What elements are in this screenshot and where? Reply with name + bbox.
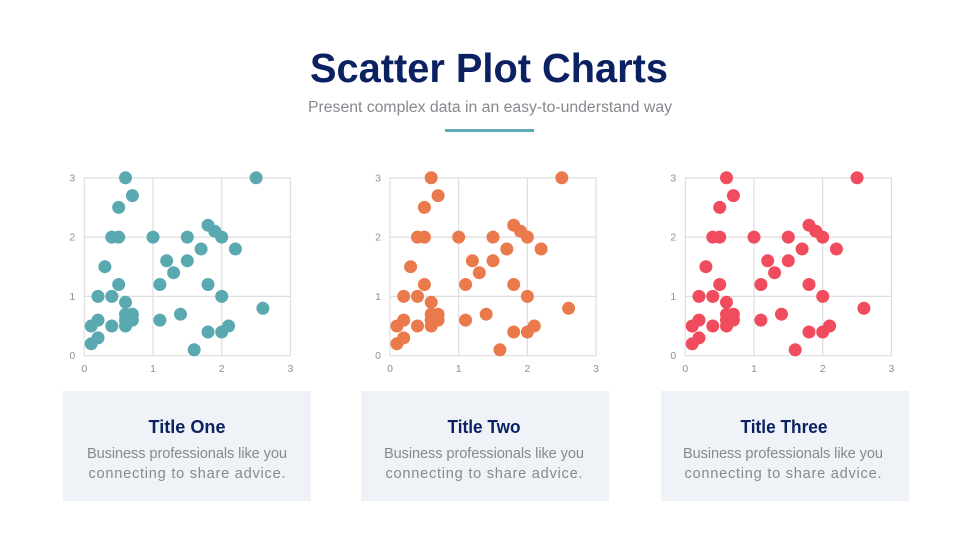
scatter chart: red xyxy=(670,171,894,375)
scatter chart: teal: 2 xyxy=(219,363,225,375)
scatter chart: teal xyxy=(69,171,293,375)
scatter chart: orange: 3 xyxy=(375,172,381,184)
subtitle: Present complex data in an easy-to-understand way xyxy=(308,99,672,116)
scatter chart: orange: 2 xyxy=(375,232,381,244)
scatter chart: teal: 2 xyxy=(69,232,75,244)
scatter chart: teal: 3 xyxy=(287,363,293,375)
scatter chart: teal: 0 xyxy=(69,350,75,362)
panel: title two xyxy=(361,391,609,501)
scatter chart: teal: 1 xyxy=(69,291,75,303)
scatter chart: orange: 2 xyxy=(524,363,530,375)
scatter chart: red: 1 xyxy=(751,363,757,375)
panel: title two: Business professionals like you xyxy=(384,446,584,462)
scatter chart: red: 3 xyxy=(888,363,894,375)
title: Scatter Plot Charts xyxy=(310,45,668,91)
scatter chart: teal: 1 xyxy=(150,363,156,375)
panel: title one: connecting to share advice. xyxy=(88,466,286,482)
scatter chart: teal: 3 xyxy=(69,172,75,184)
panel: title three: connecting to share advice. xyxy=(684,466,882,482)
scatter chart: orange: 1 xyxy=(456,363,462,375)
scatter chart: red: 2 xyxy=(670,232,676,244)
scatter chart: orange xyxy=(375,171,599,375)
panel: title three: Business professionals like you xyxy=(683,446,883,462)
scatter chart: orange: 0 xyxy=(375,350,381,362)
panel: title two: connecting to share advice. xyxy=(386,466,582,482)
panel: title three xyxy=(661,391,909,501)
scatter chart: red: 1 xyxy=(670,291,676,303)
scatter chart: red: 2 xyxy=(820,363,826,375)
scatter chart: red: 0 xyxy=(682,363,688,375)
panel: title three: Title Three xyxy=(740,417,828,437)
panel: title two: Title Two xyxy=(448,417,520,437)
panel: title one: Business professionals like you xyxy=(87,446,287,462)
scatter chart: red: 0 xyxy=(670,350,676,362)
panel: title one: Title One xyxy=(148,417,226,437)
scatter chart: orange: 1 xyxy=(375,291,381,303)
panel: title one xyxy=(63,391,311,501)
scatter chart: red: 3 xyxy=(670,172,676,184)
scatter chart: orange: 0 xyxy=(387,363,393,375)
accent rule xyxy=(445,129,534,132)
scatter chart: teal: 0 xyxy=(81,363,87,375)
scatter chart: orange: 3 xyxy=(593,363,599,375)
